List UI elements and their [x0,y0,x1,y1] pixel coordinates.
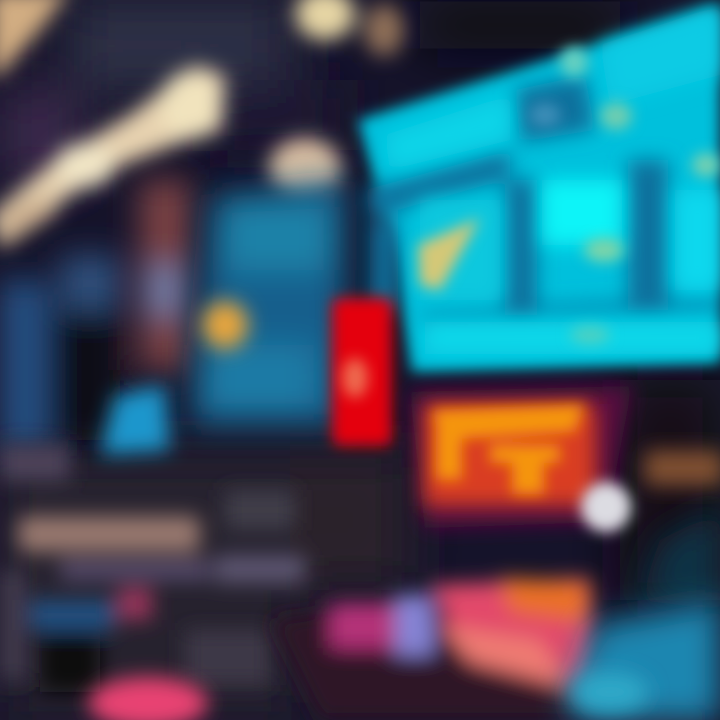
pink blob bottom [88,677,208,720]
screen yellow marks [418,47,720,344]
ceiling lights [0,0,404,75]
diagonal cream light streak [0,65,341,250]
screen bright cells [385,5,720,354]
magenta and orange panel [410,386,632,528]
white circle [581,482,631,532]
red panel highlight [342,358,368,398]
orange glyph shapes [432,404,585,494]
screen dark grid [365,75,720,325]
figure at left [0,180,190,450]
light blue patch [100,385,170,455]
orange badge [202,301,248,349]
dark teal lower right [640,510,720,610]
cyan screen [358,5,720,372]
blue desk edge [565,600,720,720]
red panel [332,298,392,446]
keyboard glow bottom [270,578,720,720]
desk stripes left [0,445,305,692]
blue figure [100,180,345,455]
brown side bar [644,450,720,486]
